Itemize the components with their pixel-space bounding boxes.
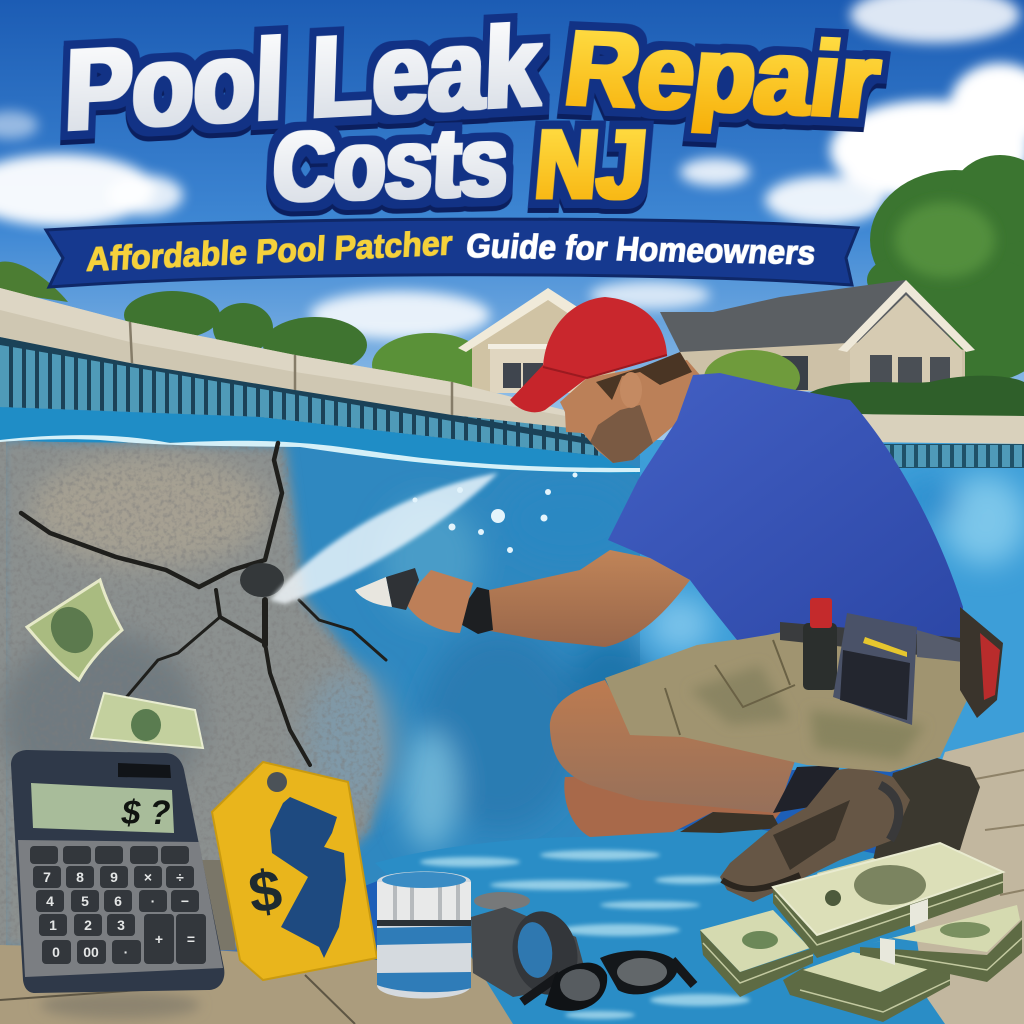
calculator display: [31, 783, 174, 833]
swim goggles: [522, 951, 694, 1011]
calculator key labels: 4: [46, 893, 54, 909]
sealant jar: [377, 872, 471, 998]
calculator key labels: 0: [52, 944, 60, 960]
sky background: [0, 0, 1024, 460]
calculator key labels: 00: [83, 944, 99, 960]
rear boot: [873, 758, 980, 860]
calculator key labels: ·: [124, 944, 128, 960]
front boot: [720, 767, 910, 902]
hedges: [704, 350, 1024, 420]
calculator key labels: 5: [81, 893, 89, 909]
calculator key labels: 2: [84, 917, 92, 933]
wall cracks: [21, 443, 386, 765]
stacks of cash: [700, 843, 1022, 1022]
subtitle banner: [46, 219, 858, 287]
shorts: [605, 627, 967, 772]
cash bundle top: [773, 843, 1003, 958]
clouds: [0, 0, 1024, 339]
concrete wall section: [0, 438, 400, 950]
house: [458, 280, 975, 393]
calculator solar panel: [118, 763, 171, 778]
title line one white: Pool Leak: [63, 2, 544, 155]
calculator key labels: [43, 869, 195, 960]
floor ripples: [420, 850, 750, 1019]
calculator key labels: 9: [110, 869, 118, 885]
calculator key labels: =: [187, 931, 195, 947]
pool floor water: [375, 825, 945, 1024]
face and neck: [560, 352, 700, 463]
title word NJ: NJ: [531, 109, 651, 219]
water line foam: [0, 435, 640, 472]
water spray from leak: [270, 472, 578, 604]
tag dollar sign: $: [245, 857, 286, 926]
red cap: [510, 297, 667, 412]
calculator key labels: 1: [49, 917, 57, 933]
shirt: [608, 373, 963, 640]
banner text white: Guide for Homeowners: [464, 227, 818, 272]
calculator key labels: +: [155, 931, 163, 947]
watch: [459, 587, 493, 634]
calculator key labels: −: [181, 893, 189, 909]
knee and shin: [550, 680, 797, 813]
man repairing pool: [355, 297, 980, 902]
arm: [485, 550, 690, 647]
calculator key labels: ×: [144, 869, 152, 885]
calculator keys: [30, 846, 206, 964]
stone paving: [0, 732, 1024, 1024]
concrete blocks behind tag: [200, 860, 235, 950]
hand: [404, 570, 473, 633]
calculator key labels: 3: [117, 917, 125, 933]
pool wall: [0, 430, 640, 950]
tool belt: [780, 598, 1003, 725]
NJ state map: [270, 797, 346, 958]
leaning dollar bill: [91, 693, 203, 748]
pool coping and tile band: [0, 288, 1024, 468]
title word Costs: Costs: [271, 106, 510, 222]
calculator: [11, 750, 224, 993]
right pool water: [600, 440, 1024, 770]
background trees: [0, 155, 1024, 397]
water mottling: [380, 475, 1024, 850]
calculator key labels: 8: [76, 869, 84, 885]
title word Repair: Repair: [559, 9, 886, 140]
calculator key labels: 6: [114, 893, 122, 909]
sock: [773, 765, 840, 813]
floating dollar bill: [27, 580, 122, 680]
New Jersey price tag: [212, 762, 377, 980]
cash bundle bottom: [783, 952, 950, 1022]
cash bundle left: [700, 910, 813, 997]
calculator key labels: ·: [151, 893, 155, 909]
cash bundle right: [860, 905, 1022, 982]
title: [63, 2, 886, 222]
patch tube roll: [471, 892, 585, 1001]
water band above crack: [0, 407, 640, 474]
banner text yellow: Affordable Pool Patcher: [86, 224, 453, 279]
patch scraper: [355, 568, 419, 610]
lower calf: [564, 775, 790, 837]
calculator key labels: ÷: [176, 869, 184, 885]
calculator key labels: 7: [43, 869, 51, 885]
calculator display: $ ?: [120, 794, 171, 832]
